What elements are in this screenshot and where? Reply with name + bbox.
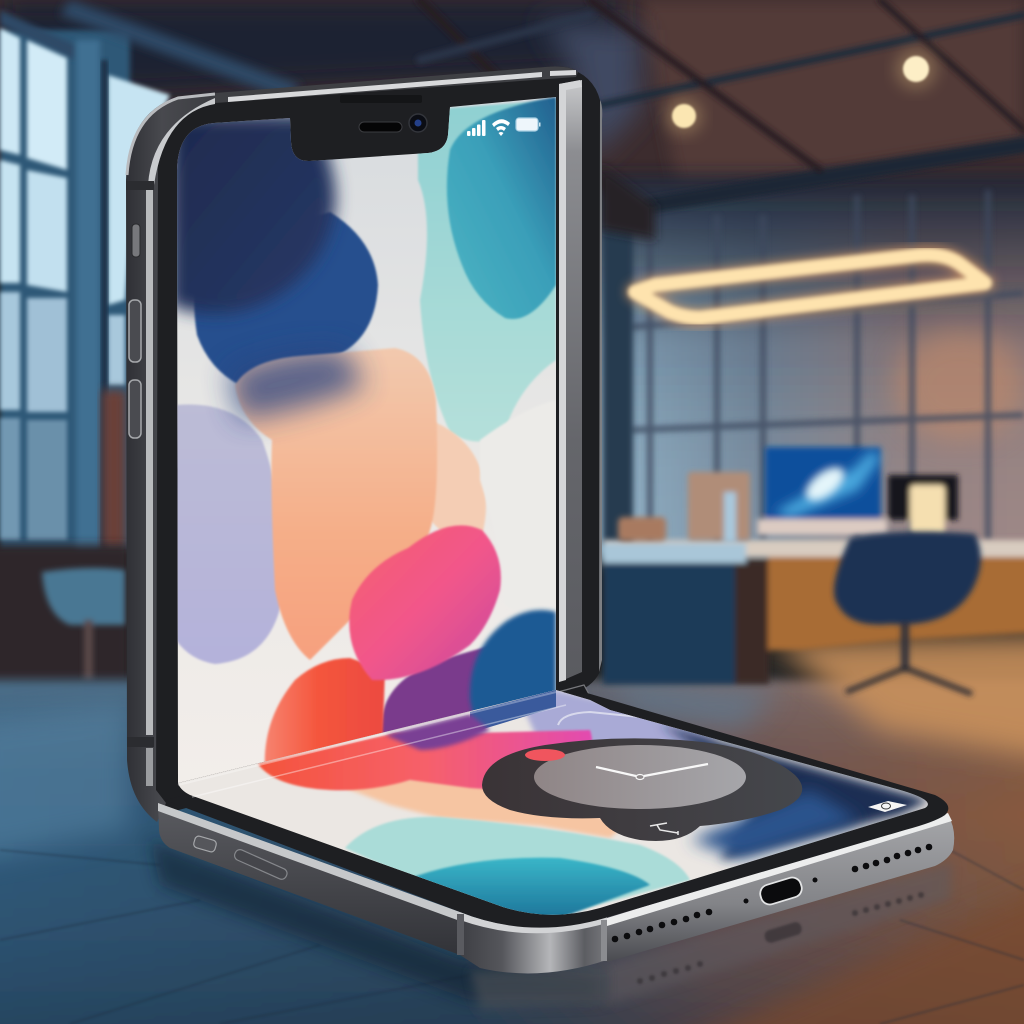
front camera and earpiece	[340, 95, 427, 132]
lower half body	[158, 685, 954, 973]
light teal blob	[418, 100, 556, 442]
neon ring light	[635, 255, 985, 318]
lavender upper area	[521, 690, 717, 742]
peach main blob	[235, 348, 437, 660]
upper screen wallpaper	[170, 90, 562, 800]
upper half body	[126, 67, 602, 822]
pink blob	[349, 525, 501, 680]
peach blob small	[432, 422, 487, 532]
deep teal blob	[405, 858, 650, 920]
purple overlap	[381, 646, 520, 733]
left long side	[158, 803, 460, 955]
reflection	[607, 862, 952, 1005]
light teal blob	[345, 817, 690, 915]
blue lower right	[470, 610, 556, 725]
black frame	[150, 67, 602, 815]
side button and tray	[193, 835, 289, 881]
office equipment on desk	[618, 447, 958, 542]
ceiling beams	[420, 0, 1024, 220]
right long side	[607, 815, 954, 962]
side buttons	[129, 224, 141, 438]
left lower wall	[0, 545, 130, 685]
floor	[0, 680, 1024, 1024]
dark navy right	[660, 725, 930, 860]
speaker grille right	[852, 844, 932, 872]
left windows	[0, 30, 130, 550]
black bezel of lower half	[165, 693, 948, 928]
off-white right panel	[479, 420, 510, 501]
status bar icons	[467, 118, 540, 136]
lamps	[666, 49, 936, 134]
hinge strip	[559, 80, 582, 682]
peach below red	[347, 779, 618, 839]
hinge foot	[558, 685, 591, 706]
desk	[603, 540, 1024, 684]
left armchair	[42, 568, 125, 680]
dark navy blob	[170, 115, 336, 314]
phone shadow and reflection on floor	[150, 840, 952, 1010]
cover clock widget	[482, 738, 802, 841]
crease tones: blue band	[470, 690, 556, 733]
silver side stripe	[146, 187, 153, 735]
red and pink reflection	[258, 730, 592, 790]
hinge crease line	[178, 692, 566, 797]
ceiling	[0, 0, 1024, 260]
window frame beam	[60, 0, 300, 100]
office chair	[834, 532, 981, 694]
bright teal blob	[447, 97, 556, 319]
USB-C port	[758, 875, 804, 907]
lavender blob	[176, 404, 282, 664]
phone	[126, 67, 602, 822]
speaker grille left	[612, 909, 712, 942]
front corner metal	[457, 914, 607, 973]
sensor dot	[812, 878, 818, 882]
lower screen wallpaper	[170, 685, 950, 925]
left metal side	[126, 93, 215, 822]
top metal edge	[215, 67, 578, 103]
red blob	[263, 656, 386, 762]
silver corner highlight	[127, 94, 215, 175]
cover camera icon	[868, 801, 907, 812]
blue blob	[194, 210, 378, 395]
back wall	[590, 190, 1024, 560]
microphone	[744, 898, 748, 904]
window grid right	[630, 190, 1024, 540]
